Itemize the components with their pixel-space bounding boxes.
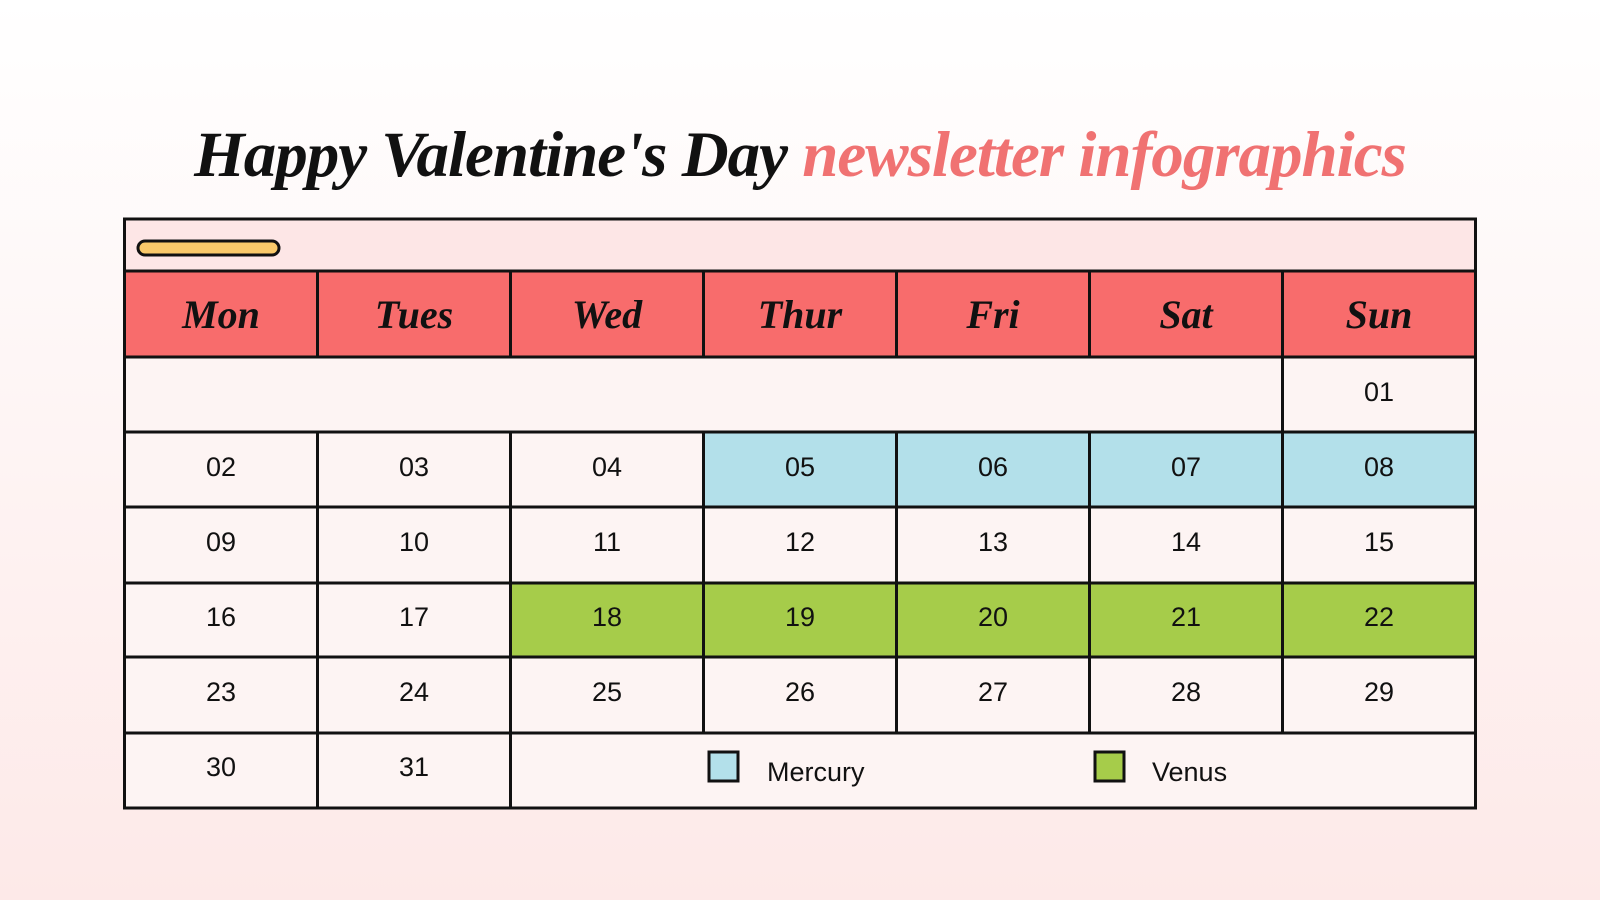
day headers: Tues [375, 292, 453, 337]
dates: 25 [592, 677, 622, 707]
dates: 14 [1171, 527, 1201, 557]
dates: 03 [399, 452, 429, 482]
highlight: Mercury [704, 432, 1476, 507]
dates: 29 [1364, 677, 1394, 707]
dates: 28 [1171, 677, 1201, 707]
highlight: Venus [510, 583, 1476, 657]
grid lines [124, 219, 1476, 808]
dates: 16 [206, 602, 236, 632]
dates: 27 [978, 677, 1008, 707]
dates [206, 377, 1394, 782]
day headers: Wed [572, 292, 643, 337]
dates: 08 [1364, 452, 1394, 482]
dates: 30 [206, 752, 236, 782]
title: Happy Valentine's Day newsletter infographics [194, 119, 1406, 191]
dates: 10 [399, 527, 429, 557]
dates: 20 [978, 602, 1008, 632]
dates: 26 [785, 677, 815, 707]
dates: 23 [206, 677, 236, 707]
legend: Venus [1095, 752, 1227, 787]
day headers: Sun [1346, 292, 1412, 337]
dates: 12 [785, 527, 815, 557]
day headers: Fri [965, 292, 1020, 337]
dates: 21 [1171, 602, 1201, 632]
day headers: Sat [1159, 292, 1215, 337]
dates: 04 [592, 452, 622, 482]
header strip [124, 219, 1476, 271]
dates: 11 [593, 527, 621, 557]
dates: 17 [399, 602, 429, 632]
day headers: Thur [758, 292, 843, 337]
dates: 02 [206, 452, 236, 482]
yellow tab [138, 241, 279, 255]
dates: 15 [1364, 527, 1394, 557]
day headers: Mon [181, 292, 260, 337]
dates: 31 [399, 752, 429, 782]
dates: 09 [206, 527, 236, 557]
dates: 07 [1171, 452, 1201, 482]
legend: Mercury [709, 752, 865, 787]
legend: Mercury: Mercury [767, 757, 865, 787]
dates: 22 [1364, 602, 1394, 632]
dates: 18 [592, 602, 622, 632]
legend: Venus: Venus [1152, 757, 1227, 787]
dates: 06 [978, 452, 1008, 482]
dates: 05 [785, 452, 815, 482]
dates: 19 [785, 602, 815, 632]
dates: 24 [399, 677, 429, 707]
dates: 13 [978, 527, 1008, 557]
day headers [124, 271, 1476, 357]
dates: 01 [1364, 377, 1394, 407]
